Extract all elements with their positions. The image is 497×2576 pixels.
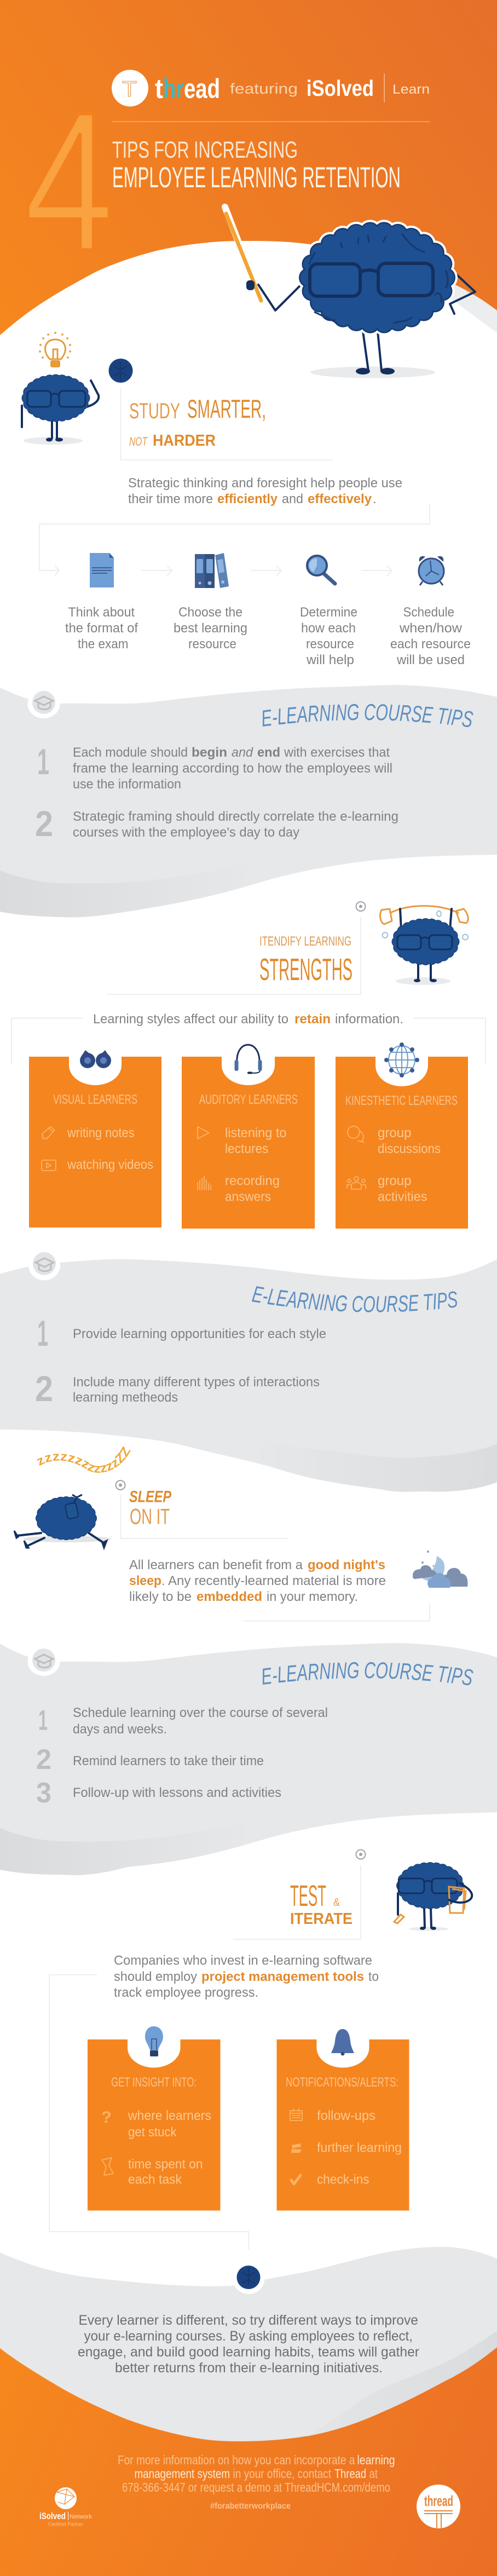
- heading: ON IT: [130, 1505, 170, 1529]
- heading: TEST: [290, 1880, 326, 1912]
- item: group activities: [347, 1174, 427, 1205]
- footer orange background: [0, 2300, 497, 2576]
- item: group discussions: [348, 1126, 441, 1156]
- tip 2: 2: [36, 1744, 51, 1776]
- item: where learners get stuck: [101, 2108, 211, 2140]
- step 3: magnifier: resource: [306, 637, 354, 652]
- icon: target: [356, 1849, 366, 1859]
- body text: All learners can benefit from a: [129, 1558, 303, 1572]
- footer contact text: [118, 2453, 395, 2511]
- heading: [290, 1880, 352, 1928]
- closing text: your e-learning courses. By asking employees to reflect,: [84, 2329, 413, 2344]
- footer contact text: 678-366-3447 or request a demo at ThreadHCM.com/demo: [122, 2480, 390, 2494]
- icon: dark brain badge: [108, 359, 132, 383]
- logo: isolved network partner: iSolved: [39, 2511, 66, 2521]
- tip 1: with exercises that: [284, 745, 390, 760]
- footer contact text: learning: [357, 2453, 395, 2467]
- card: get insight into: [88, 2026, 220, 2211]
- header orange background: [0, 0, 497, 350]
- step 1: document: the format of: [65, 621, 138, 636]
- card heading: VISUAL LEARNERS: [53, 1092, 137, 1107]
- shadow: [310, 367, 435, 378]
- heading: E-LEARNING COURSE TIPS: [263, 704, 473, 727]
- item: recording: answers: [225, 1189, 271, 1205]
- thread wordmark: hr: [163, 73, 184, 104]
- item: where learners get stuck: get stuck: [128, 2125, 177, 2140]
- heading: &: [333, 1897, 340, 1909]
- panel: closing message: [0, 2247, 497, 2441]
- body text: sleep: [129, 1574, 161, 1588]
- tip 1: [37, 1313, 326, 1353]
- item: group discussions: group: [378, 1126, 412, 1140]
- step 2: binders: Choose the: [178, 605, 242, 620]
- step 3: magnifier: [300, 556, 357, 667]
- logo: isolved network partner: Network: [70, 2514, 93, 2520]
- heading: [259, 934, 352, 987]
- illustration: sleeping brain: [14, 1495, 111, 1548]
- section: study smarter: [22, 332, 471, 667]
- step 4: alarm clock: when/how: [399, 621, 463, 636]
- tip 3: Follow-up with lessons and activities: [73, 1785, 281, 1800]
- intro text: [128, 476, 402, 506]
- intro text: efficiently: [217, 492, 278, 506]
- tip 1: Provide learning opportunities for each style: [73, 1327, 326, 1341]
- closing text: [78, 2313, 419, 2376]
- thread wordmark: [155, 73, 220, 104]
- title: [112, 137, 401, 194]
- tip 2: courses with the employee's day to day: [73, 825, 299, 840]
- heading: E-LEARNING COURSE TIPS: [263, 1662, 473, 1685]
- heading: SLEEP: [129, 1488, 172, 1506]
- item: further learning: further learning: [317, 2141, 402, 2155]
- tip 1: use the information: [73, 777, 181, 792]
- tip 1: end: [257, 745, 280, 760]
- card: notifications and alerts: [277, 2029, 409, 2211]
- card: visual learners: [29, 1050, 161, 1228]
- step 3: magnifier: how each: [301, 621, 356, 636]
- tip 2: Include many different types of interactions: [73, 1375, 320, 1390]
- step 4: alarm clock: will be used: [396, 653, 465, 667]
- logo: isolved network partner: [39, 2487, 93, 2527]
- tip 2: Strategic framing should directly correlate the e-learning: [73, 809, 398, 824]
- icon: light bulb: [145, 2026, 163, 2056]
- step 1: document: [65, 553, 138, 652]
- item: time spent on each task: each task: [128, 2172, 182, 2187]
- footer contact text: Thread: [334, 2466, 366, 2481]
- card heading: AUDITORY LEARNERS: [199, 1092, 298, 1107]
- intro text: and: [282, 492, 303, 506]
- step 4: alarm clock: each resource: [390, 637, 471, 652]
- tip 1: 1: [37, 741, 49, 782]
- intro text: [93, 1012, 403, 1027]
- intro text: track employee progress.: [114, 1985, 258, 2000]
- body text: embedded: [197, 1589, 262, 1604]
- isolved wordmark: iSolved: [307, 76, 374, 101]
- intro text: should employ: [114, 1969, 197, 1984]
- icon: light bulb: [39, 332, 71, 367]
- section: test and iterate: [49, 1849, 472, 2250]
- tip 1: Each module should: [73, 745, 188, 760]
- item: where learners get stuck: ?: [101, 2108, 112, 2127]
- item: check-ins: [291, 2172, 369, 2187]
- tip 1: Schedule learning over the course of several: [73, 1705, 328, 1720]
- item: listening: [198, 1126, 287, 1156]
- footer contact text: management system: [135, 2466, 230, 2481]
- illustration: brain with clipboard: [394, 1865, 472, 1930]
- section: identify learning strengths: [11, 902, 486, 1229]
- illustration: teacher brain with pointer: [225, 207, 475, 378]
- icon: bell: [331, 2029, 354, 2055]
- closing text: Every learner is different, so try different ways to improve: [79, 2313, 418, 2328]
- tip 2: 2: [35, 803, 53, 844]
- intro text: information.: [335, 1012, 403, 1027]
- learn label: Learn: [392, 82, 430, 97]
- card: kinesthetic learners: [336, 1042, 468, 1229]
- footer contact text: in your office, contact: [233, 2466, 332, 2481]
- heading: NOT: [129, 435, 148, 448]
- footer contact text: #forabetterworkplace: [210, 2502, 291, 2511]
- tip 3: 3: [36, 1777, 51, 1809]
- heading: HARDER: [153, 432, 216, 449]
- intro text: project management tools: [201, 1969, 364, 1984]
- big number 4: 4: [24, 70, 114, 292]
- white hill background: [0, 241, 497, 712]
- intro text: to: [368, 1969, 379, 1984]
- intro text: retain: [294, 1012, 331, 1027]
- tip 1: [38, 1705, 328, 1737]
- icon: graduation cap: [27, 690, 60, 718]
- item: listening: lectures: [225, 1142, 268, 1156]
- item: time spent on each task: [102, 2157, 203, 2187]
- intro text: Learning styles affect our ability to: [93, 1012, 288, 1027]
- icon: moon and clouds: [413, 1551, 467, 1588]
- section: identify learning strengths: STRENGTHS: [259, 952, 352, 987]
- step 2: binders: resource: [188, 637, 236, 652]
- title: TIPS FOR INCREASING: [112, 137, 298, 163]
- step 1: document: Think about: [68, 605, 135, 620]
- icon: target: [356, 902, 366, 911]
- footer contact text: at: [369, 2466, 378, 2481]
- icon: graduation cap: [27, 1647, 60, 1676]
- panel: e-learning tips 1: [0, 685, 497, 918]
- tip 2: 2: [35, 1368, 53, 1409]
- card heading: NOTIFICATIONS/ALERTS:: [286, 2075, 398, 2090]
- tip 2: learning metheods: [73, 1390, 178, 1405]
- body text: . Any recently-learned material is more: [161, 1574, 386, 1588]
- icon: globe network: [384, 1042, 419, 1077]
- icon: thread circle logo: T: [122, 77, 137, 101]
- item: group activities: activities: [378, 1189, 427, 1205]
- item: where learners get stuck: where learners: [128, 2108, 211, 2123]
- logo: thread circle: thread: [424, 2493, 453, 2509]
- item: writing notes: [42, 1126, 135, 1140]
- icon: target: [116, 1480, 125, 1490]
- body text: in your memory.: [267, 1589, 358, 1604]
- intro text: Strategic thinking and foresight help people use: [128, 476, 402, 491]
- step 1: document: the exam: [78, 637, 128, 652]
- tip 1: days and weeks.: [73, 1722, 167, 1737]
- step 4: alarm clock: [390, 556, 471, 667]
- step 3: magnifier: will help: [306, 653, 354, 667]
- thread wordmark: ead: [184, 73, 220, 104]
- tip 2: Remind learners to take their time: [73, 1754, 264, 1768]
- icon: brain badge: [233, 2263, 265, 2294]
- panel: e-learning tips 2: [0, 1252, 497, 1492]
- item: follow-ups: follow-ups: [317, 2108, 375, 2123]
- zzz trail: zzzzzzzzzzzzZZ: [37, 1447, 131, 1473]
- closing text: better returns from their e-learning initiatives.: [115, 2360, 383, 2376]
- heading: [129, 1488, 172, 1529]
- section: sleep on it: [13, 1447, 467, 1622]
- body text: likely to be: [129, 1589, 192, 1604]
- tip 1: [37, 741, 392, 792]
- tip 1: frame the learning according to how the employees will: [73, 761, 392, 776]
- heading: ITERATE: [290, 1910, 352, 1928]
- heading: ITENDIFY LEARNING: [259, 934, 351, 949]
- item: watching videos: watching videos: [67, 1157, 153, 1172]
- illustration: small brain: [22, 378, 99, 445]
- intro text: effectively: [308, 492, 372, 506]
- icon: headset: [234, 1045, 262, 1074]
- panel: e-learning tips 3: [0, 1643, 497, 1875]
- step 2: binders: best learning: [174, 621, 247, 636]
- step 3: magnifier: Determine: [300, 605, 357, 620]
- icon: graduation cap: [28, 1250, 60, 1280]
- tip 1: 1: [37, 1313, 48, 1353]
- item: time spent on each task: time spent on: [128, 2157, 203, 2171]
- header logos: [112, 70, 430, 106]
- step 4: alarm clock: Schedule: [403, 605, 454, 620]
- logo: isolved network partner: Certified Partner: [48, 2522, 83, 2527]
- heading: STUDY: [129, 399, 180, 423]
- icon: binoculars: [80, 1050, 111, 1068]
- tip 2: [35, 803, 398, 844]
- logo: thread circle: [417, 2485, 460, 2528]
- tip 1: and: [232, 745, 253, 760]
- heading: SMARTER,: [187, 394, 266, 423]
- intro text: .: [373, 492, 377, 506]
- card heading: GET INSIGHT INTO:: [111, 2075, 197, 2090]
- icon: thread circle logo: [112, 70, 148, 106]
- illustration: brain lifting weights: [380, 906, 468, 985]
- tip 3: [36, 1777, 281, 1809]
- body text: good night's: [308, 1558, 385, 1572]
- intro text: [114, 1953, 379, 2000]
- item: listening: listening to: [225, 1126, 287, 1140]
- item: group activities: group: [378, 1174, 412, 1188]
- hill grey shadow: [317, 245, 497, 332]
- heading: [129, 394, 266, 449]
- glasses: [310, 264, 360, 296]
- tip 2: [36, 1744, 264, 1776]
- item: recording: recording: [225, 1174, 280, 1188]
- footer contact text: For more information on how you can incorporate a: [118, 2453, 355, 2467]
- item: writing notes: writing notes: [67, 1126, 135, 1140]
- step 2: binders: [174, 553, 247, 652]
- item: recording: [198, 1174, 280, 1205]
- card: auditory learners: [182, 1045, 315, 1229]
- closing text: engage, and build good learning habits, teams will gather: [78, 2344, 419, 2360]
- item: group discussions: discussions: [378, 1142, 441, 1156]
- tip 1: 1: [38, 1705, 48, 1737]
- body text: [129, 1558, 386, 1604]
- tip 2: [35, 1368, 320, 1409]
- intro text: their time more: [128, 492, 213, 506]
- heading: E-LEARNING COURSE TIPS: [252, 1286, 457, 1312]
- featuring label: featuring: [230, 80, 298, 97]
- thread wordmark: t: [155, 73, 163, 104]
- intro text: Companies who invest in e-learning software: [114, 1953, 372, 1968]
- tip 1: begin: [192, 745, 227, 760]
- item: check-ins: check-ins: [317, 2172, 369, 2187]
- item: follow-ups: [290, 2108, 375, 2123]
